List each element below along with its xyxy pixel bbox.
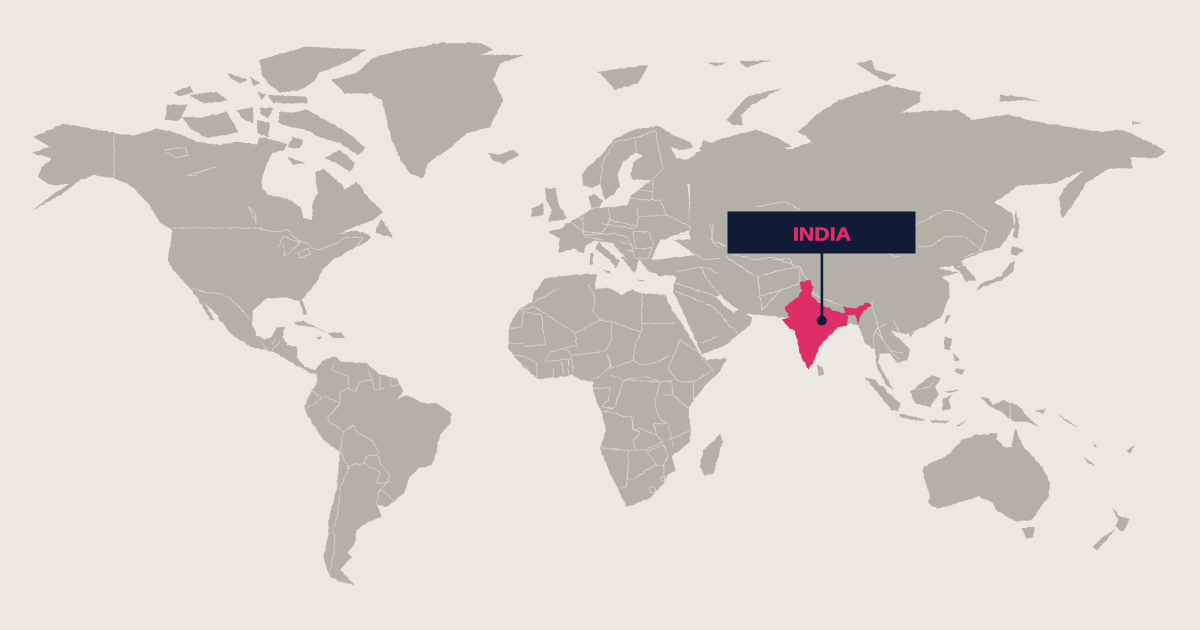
Canadian Arctic islands	[278, 110, 365, 155]
world map: Asia	[532, 60, 1166, 390]
world map: South America	[305, 357, 452, 585]
Australia	[923, 428, 1050, 522]
world map: Southeast Asia and Oceania	[865, 320, 1135, 551]
Europe and Scandinavia	[532, 126, 723, 281]
borders: South America	[307, 362, 398, 573]
highlighted country: India	[782, 280, 872, 369]
callout box	[728, 212, 916, 254]
New Zealand	[1112, 507, 1129, 532]
borders: Africa	[509, 285, 713, 487]
world map: Africa	[508, 274, 727, 507]
Newfoundland and Greenland	[375, 219, 393, 237]
callout: India label with pointer	[728, 212, 916, 326]
borders: North America	[114, 133, 363, 350]
Korea	[951, 260, 977, 282]
world map: North America	[32, 43, 523, 374]
Arctic and Pacific islands of Asia	[598, 60, 1142, 350]
borders: Europe	[570, 130, 720, 260]
borders: Asia	[676, 202, 987, 343]
borders: Oceania and Indochina	[873, 320, 1010, 421]
pointer line	[821, 253, 823, 320]
Caribbean islands	[295, 321, 325, 332]
callout label: INDIA	[793, 224, 851, 244]
Sri Lanka	[817, 365, 824, 376]
pointer dot	[817, 316, 827, 326]
